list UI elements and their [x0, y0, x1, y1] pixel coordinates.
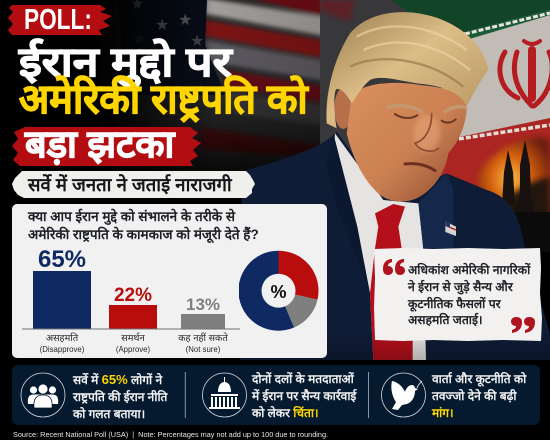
- bar chart: असहमति: [46, 332, 79, 344]
- icon: capitol: [202, 373, 246, 417]
- question: अमेरिकी राष्ट्रपति के कामकाज को मंजूरी देते हैं?: [28, 227, 259, 242]
- text: finding 3: मांग।: [432, 406, 454, 420]
- tie: [370, 204, 413, 360]
- text: finding 1: सर्वे में 65% लोगों ने: [73, 372, 162, 387]
- dividers and icons: [20, 372, 426, 418]
- banner: poll: [8, 5, 255, 198]
- donut chart: [239, 250, 318, 331]
- quote marks close: [511, 317, 535, 333]
- text: finding 2: को लेकर चिंता।: [252, 406, 318, 420]
- bar chart: समर्थन: [121, 332, 145, 344]
- icon: people: [21, 373, 65, 417]
- heading line 2: अमेरिकी राष्ट्रपति को: [19, 76, 308, 122]
- quote text: अधिकांश अमेरिकी नागरिकों: [408, 263, 530, 277]
- towers: [502, 150, 515, 205]
- features: [388, 106, 465, 171]
- text: finding 1: को गलत बताया।: [73, 407, 145, 421]
- face shading: [413, 115, 440, 152]
- quote marks open: [383, 259, 405, 275]
- lapel pin: [445, 221, 456, 236]
- question: क्या आप ईरान मुद्दे को संभालने के तरीके से: [28, 209, 235, 224]
- quote text: ने ईरान से जुड़े सैन्य और: [408, 280, 513, 294]
- callout: quote: [374, 248, 542, 341]
- bar chart: (Not sure): [186, 345, 221, 354]
- text: finding 2: [252, 372, 357, 420]
- text: finding 2: दोनों दलों के मतदाताओं: [252, 372, 354, 386]
- panel: poll chart: [12, 204, 327, 358]
- quote text: [408, 262, 531, 327]
- Iran flag: [320, 0, 550, 252]
- ear: [334, 88, 352, 129]
- text: finding 3: [432, 372, 527, 420]
- US flag: ★: [155, 15, 169, 34]
- text: finding 3: वार्ता और कूटनीति को: [432, 372, 526, 386]
- question: [28, 208, 259, 244]
- bar chart: 65%: [38, 246, 86, 273]
- icon: dove: [382, 373, 426, 417]
- suit: [240, 132, 550, 360]
- bar chart: (Approve): [116, 345, 151, 354]
- text: finding 1: [72, 372, 168, 421]
- portrait: [240, 12, 550, 360]
- text: finding 3: तवज्जो देने की बढ़ी: [432, 389, 516, 403]
- bar chart: 22%: [114, 285, 152, 306]
- US flag: ★: [178, 10, 192, 29]
- bar chart: (Disapprove): [40, 345, 85, 354]
- text: finding 1: राष्ट्रपति की ईरान नीति: [73, 390, 167, 404]
- donut chart: %: [270, 282, 287, 302]
- hair: [326, 12, 488, 128]
- quote text: असहमति जताई।: [408, 313, 483, 327]
- US flag: [0, 0, 350, 180]
- subheading: सर्वे में जनता ने जताई नाराजगी: [28, 174, 232, 195]
- source note: Source: Recent National Poll (USA) | Note: Percentages may not add up to 100 due to rounding.: [13, 430, 328, 439]
- text: finding 2: में ईरान पर सैन्य कार्रवाई: [252, 389, 356, 403]
- panel: key findings: [12, 365, 540, 425]
- headline: [8, 4, 310, 198]
- lapels: [418, 173, 453, 248]
- shirt: [333, 133, 426, 360]
- heading line 1: ईरान मुद्दो पर: [19, 39, 232, 85]
- fire: [478, 137, 550, 220]
- emblem: [500, 41, 550, 106]
- heading: poll: POLL:: [24, 4, 92, 36]
- bar chart: 13%: [186, 295, 220, 314]
- bar chart: [22, 246, 240, 354]
- bar chart: कह नहीं सकते: [178, 332, 228, 344]
- face: [347, 83, 467, 202]
- hair strands: [350, 26, 470, 87]
- heading line 3: बड़ा झटका: [25, 124, 174, 166]
- quote text: कूटनीतिक फैसलों पर: [408, 297, 501, 311]
- US flag: ★: [190, 31, 204, 50]
- US flag: ★: [132, 29, 146, 48]
